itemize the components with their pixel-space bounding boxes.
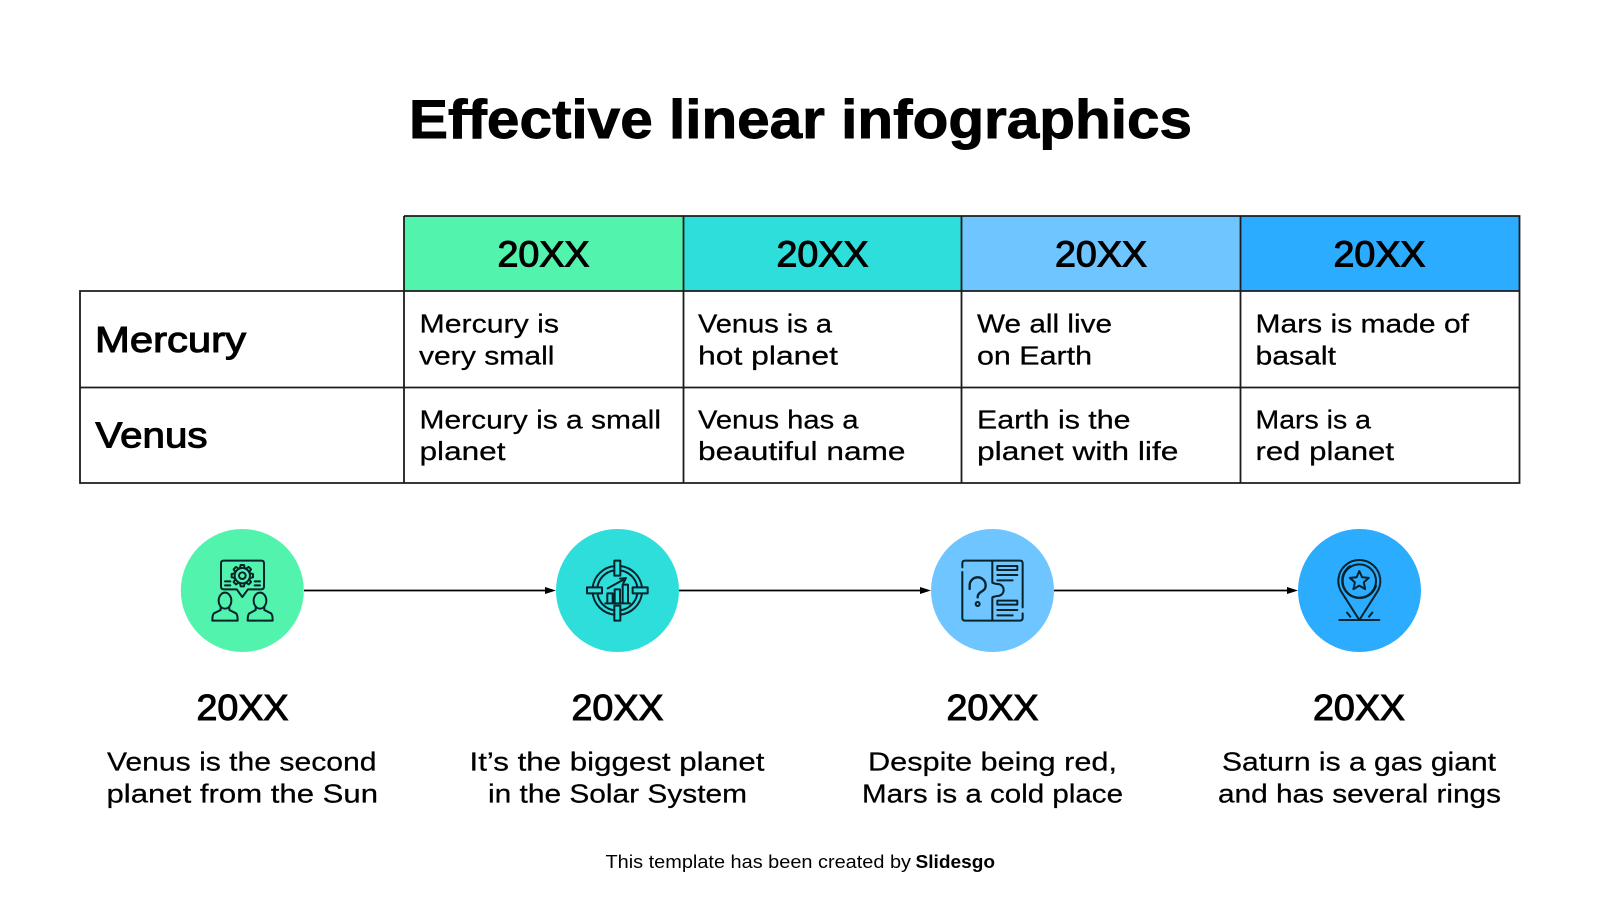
step 3 circle <box>931 529 1054 652</box>
step 4 description <box>1218 747 1501 809</box>
arrow: step 2 to step 3 <box>679 587 931 594</box>
step 4 circle <box>1298 529 1421 652</box>
row: Mercury cells: Venus is a <box>698 309 833 339</box>
arrow: step 3 to step 4 <box>1054 587 1298 594</box>
row: Venus cells: Venus has a <box>698 404 859 434</box>
row: Mercury cells: basalt <box>1256 340 1337 370</box>
step 2 year: 20XX <box>572 687 664 728</box>
step 3 description <box>862 747 1123 809</box>
row label: Venus: Venus <box>96 415 208 456</box>
header years: 20XX <box>1334 234 1426 275</box>
step 2 description <box>470 747 765 809</box>
icon: team with gear speech bubble <box>212 561 273 621</box>
row: Mercury cells: Mercury is <box>420 309 559 339</box>
step 1 description: Venus is the second <box>107 747 376 777</box>
step 1 description <box>106 747 378 809</box>
step 4 description: Saturn is a gas giant <box>1222 747 1497 777</box>
footer credit: This template has been created by <box>606 852 911 872</box>
row: Mercury cells <box>419 309 1470 370</box>
step 4 year: 20XX <box>1313 687 1405 728</box>
title: Effective linear infographics <box>409 88 1192 150</box>
row: Venus cells <box>420 404 1395 466</box>
row: Mercury cells: on Earth <box>977 340 1092 370</box>
step 1 year: 20XX <box>196 687 288 728</box>
header years <box>498 234 1426 275</box>
footer credit: Slidesgo <box>916 852 995 872</box>
row: Mercury cells: We all live <box>977 309 1112 339</box>
row: Venus cells: red planet <box>1256 436 1395 466</box>
header years: 20XX <box>498 234 590 275</box>
row: Venus cells: Mars is a <box>1256 404 1372 434</box>
icon: map pin with star <box>1338 560 1380 620</box>
step 1 circle <box>181 529 304 652</box>
step 3 description: Mars is a cold place <box>862 779 1123 809</box>
row: Venus cells: Earth is the <box>977 404 1130 434</box>
step 4 description: and has several rings <box>1218 779 1501 809</box>
header years: 20XX <box>1055 234 1147 275</box>
row: Venus cells: planet with life <box>977 436 1178 466</box>
step 2 circle <box>556 529 679 652</box>
row: Venus cells: beautiful name <box>698 436 906 466</box>
icon: puzzle with question mark <box>962 561 1023 621</box>
row label: Mercury: Mercury <box>95 319 246 360</box>
step 3 description: Despite being red, <box>868 747 1117 777</box>
row: Mercury cells: very small <box>419 340 554 370</box>
table <box>80 216 1520 483</box>
step 2 description: It’s the biggest planet <box>470 747 765 777</box>
table grid <box>80 216 1520 483</box>
header years: 20XX <box>776 234 868 275</box>
step 3 year: 20XX <box>946 687 1038 728</box>
row: Venus cells: planet <box>420 436 506 466</box>
header: column colours <box>404 216 1520 291</box>
step 1 description: planet from the Sun <box>106 779 378 809</box>
row: Mercury cells: hot planet <box>698 340 839 370</box>
icon: target with bar chart <box>587 561 648 621</box>
row: Mercury cells: Mars is made of <box>1256 309 1470 339</box>
row: Venus cells: Mercury is a small <box>420 404 661 434</box>
step 2 description: in the Solar System <box>488 779 747 809</box>
arrow: step 1 to step 2 <box>304 587 556 594</box>
